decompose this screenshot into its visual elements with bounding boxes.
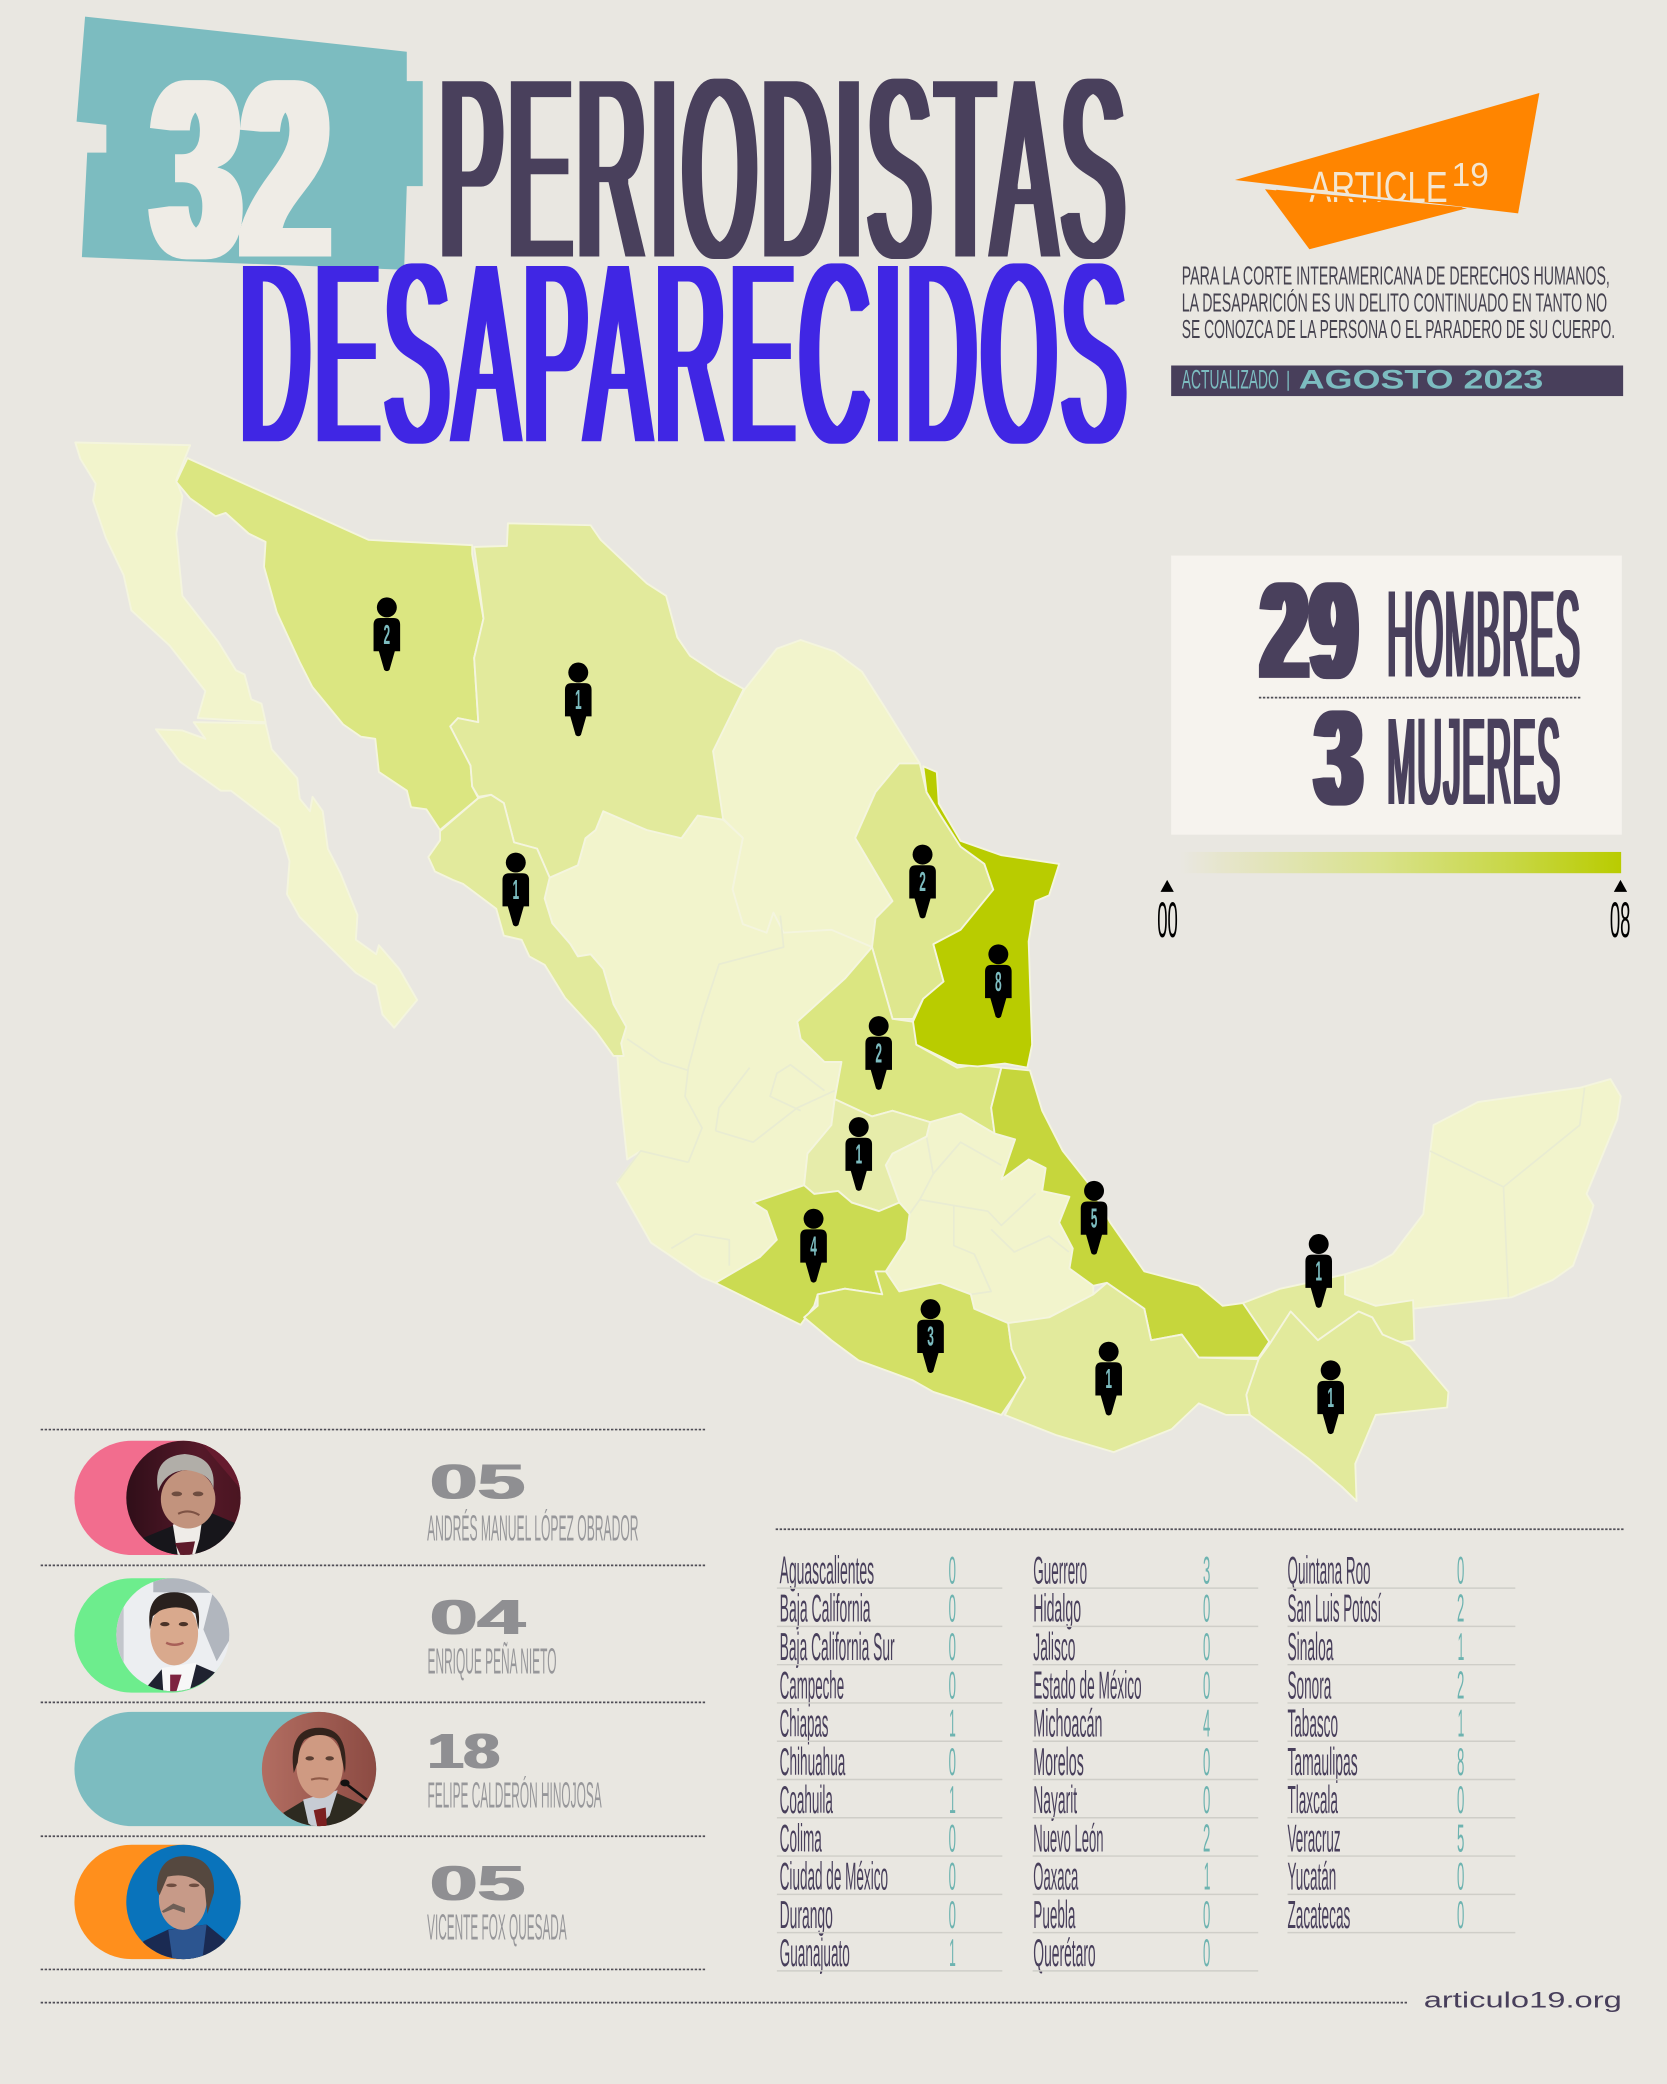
pin: Sonora 2: 2	[384, 619, 390, 650]
map of Mexico	[75, 442, 1621, 1501]
row: Nayarit: Nayarit	[1033, 1779, 1077, 1822]
state: Guanajuato	[804, 1099, 930, 1211]
row: Tabasco: 1	[1458, 1703, 1464, 1746]
state: Coahuila	[712, 640, 920, 947]
text: FELIPE CALDERÓN HINOJOSA	[428, 1776, 602, 1816]
updated date bar: AGOSTO 2023	[1299, 365, 1543, 395]
row: Guerrero	[1033, 1549, 1258, 1592]
row: Guerrero: 3	[1203, 1549, 1210, 1592]
pin: Guanajuato 1	[845, 1117, 872, 1191]
definition text	[1182, 262, 1615, 344]
row: Hidalgo: 0	[1203, 1588, 1210, 1631]
state: Baja California Sur	[156, 722, 417, 1028]
state: Chiapas	[1246, 1312, 1448, 1501]
row: Sinaloa	[1287, 1626, 1515, 1669]
state: Tamaulipas	[913, 766, 1059, 1068]
row: Baja California: Baja California	[780, 1588, 871, 1631]
bar	[74, 1578, 229, 1693]
orange paper plane	[1235, 93, 1539, 213]
row: Sinaloa: 1	[1458, 1626, 1464, 1669]
internal state borders	[617, 915, 1585, 1297]
row: Colima: Colima	[780, 1817, 822, 1860]
row: Colima	[777, 1817, 1002, 1860]
pin: Oaxaca 1: 1	[1105, 1363, 1112, 1394]
row: Chihuahua: Chihuahua	[780, 1741, 846, 1784]
pin: Tamaulipas 8	[985, 944, 1012, 1018]
text: ANDRÉS MANUEL LÓPEZ OBRADOR	[427, 1508, 638, 1548]
row: Nayarit	[1033, 1779, 1258, 1822]
marker 08	[1614, 880, 1627, 892]
count: 05	[430, 1856, 525, 1911]
row: Jalisco: 0	[1203, 1626, 1210, 1669]
row: Guanajuato: 1	[949, 1932, 956, 1975]
row: Durango: Durango	[780, 1894, 833, 1937]
count: 05	[430, 1454, 525, 1509]
row: Estado de México: 0	[1203, 1664, 1210, 1707]
portrait: Enrique Peña Nieto	[113, 1575, 233, 1695]
row: Morelos: Morelos	[1033, 1741, 1084, 1784]
row: Colima: 0	[949, 1817, 956, 1860]
row: Michoacán: Michoacán	[1033, 1703, 1102, 1746]
row: Chiapas	[777, 1703, 1002, 1746]
row: Estado de México: Estado de México	[1033, 1664, 1142, 1707]
row: Chiapas: 1	[949, 1703, 956, 1746]
row: Oaxaca: Oaxaca	[1033, 1856, 1078, 1899]
row: Morelos: 0	[1203, 1741, 1210, 1784]
row: Campeche: 0	[949, 1664, 956, 1707]
row: Sinaloa: Sinaloa	[1287, 1626, 1334, 1669]
row: Sonora	[1287, 1664, 1515, 1707]
row: Morelos	[1033, 1741, 1258, 1784]
row: Jalisco: Jalisco	[1033, 1626, 1075, 1669]
row: Tlaxcala: Tlaxcala	[1287, 1779, 1338, 1822]
row: Zacatecas: Zacatecas	[1287, 1894, 1350, 1937]
row: Veracruz	[1287, 1817, 1515, 1860]
header: number block	[77, 17, 423, 311]
portrait: Felipe Calderón Hinojosa	[259, 1708, 379, 1830]
pin: Tabasco 1	[1305, 1234, 1332, 1308]
pin: Guerrero 3: 3	[927, 1321, 934, 1352]
row: Durango	[777, 1894, 1002, 1937]
pin: Veracruz 5: 5	[1091, 1202, 1097, 1233]
pin: Nuevo León 2: 2	[919, 866, 926, 897]
table column 3	[1287, 1549, 1515, 1937]
text: VICENTE FOX QUESADA	[427, 1908, 567, 1948]
legend: colour scale: 00	[1157, 891, 1178, 948]
updated date bar	[1171, 365, 1623, 396]
state: San Luis Potosí	[797, 947, 1001, 1134]
row: Oaxaca: 1	[1204, 1856, 1210, 1899]
pin: Chihuahua 1	[565, 663, 592, 736]
pin: Tamaulipas 8: 8	[995, 966, 1002, 997]
row: Tlaxcala	[1287, 1779, 1515, 1822]
row: Sonora: 2	[1457, 1664, 1464, 1707]
row: Ciudad de México: Ciudad de México	[780, 1856, 888, 1899]
pin: Chiapas 1: 1	[1327, 1382, 1334, 1413]
state: Baja California	[75, 442, 266, 722]
pin: Guerrero 3	[917, 1299, 944, 1373]
row: Jalisco	[1033, 1626, 1258, 1669]
row: Durango: 0	[949, 1894, 956, 1937]
row: Tlaxcala: 0	[1457, 1779, 1464, 1822]
row: San Luis Potosí: San Luis Potosí	[1287, 1588, 1381, 1631]
state: central states (Querétaro, Hidalgo, México, Tlaxcala, Puebla, Morelos, CDMX)	[886, 1114, 1093, 1323]
row: Nuevo León: Nuevo León	[1033, 1817, 1103, 1860]
row: Baja California Sur: 0	[949, 1626, 956, 1669]
row: Michoacán: 4	[1203, 1703, 1210, 1746]
row: Tamaulipas: 8	[1457, 1741, 1464, 1784]
pin: Sonora 2	[374, 597, 400, 671]
row: Coahuila: 1	[949, 1779, 956, 1822]
row: Puebla	[1033, 1894, 1258, 1937]
teal torn paper shape	[77, 17, 423, 270]
pin: San Luis Potosí 2: 2	[875, 1038, 882, 1069]
bar	[74, 1712, 376, 1826]
row: Hidalgo	[1033, 1588, 1258, 1631]
pin: Sinaloa 1: 1	[512, 874, 519, 905]
row: Puebla: 0	[1203, 1894, 1210, 1937]
pin: Chiapas 1	[1317, 1360, 1344, 1434]
count: 18	[428, 1724, 500, 1779]
pin: Michoacán 4	[800, 1209, 827, 1283]
updated date bar: ACTUALIZADO	[1182, 365, 1279, 395]
row: Guanajuato: Guanajuato	[780, 1932, 850, 1975]
row: Coahuila	[777, 1779, 1002, 1822]
state: Sonora	[176, 458, 483, 830]
row: Chihuahua: 0	[949, 1741, 956, 1784]
president row: Fox	[74, 1841, 567, 1963]
pin: Guanajuato 1: 1	[855, 1139, 862, 1170]
president row: López Obrador	[74, 1435, 638, 1562]
bar	[74, 1845, 241, 1959]
row: Sonora: Sonora	[1287, 1664, 1332, 1707]
row: Aguascalientes: Aguascalientes	[780, 1549, 874, 1592]
state: Guerrero	[804, 1271, 1025, 1415]
row: Baja California Sur	[777, 1626, 1002, 1669]
state: Oaxaca	[1005, 1283, 1259, 1452]
row: Chiapas: Chiapas	[780, 1703, 828, 1746]
portrait: Vicente Fox Quesada	[126, 1844, 241, 1960]
marker 00	[1161, 880, 1174, 892]
state: Yucatán peninsula	[1345, 1079, 1621, 1309]
row: Yucatán: Yucatán	[1287, 1856, 1336, 1899]
row: Quintana Roo: 0	[1457, 1549, 1464, 1592]
row: Quintana Roo: Quintana Roo	[1287, 1549, 1371, 1592]
pin: Tabasco 1: 1	[1315, 1256, 1322, 1287]
dotted separators: presidents	[41, 1430, 1624, 2003]
row: Hidalgo: Hidalgo	[1033, 1588, 1081, 1631]
row: Campeche: Campeche	[780, 1664, 844, 1707]
row: Tamaulipas: Tamaulipas	[1287, 1741, 1358, 1784]
row: Tabasco	[1287, 1703, 1515, 1746]
logo: Article 19: 19	[1452, 157, 1489, 194]
president row: Calderón	[74, 1708, 602, 1830]
state: Nuevo León	[855, 763, 993, 1019]
portrait: Andrés Manuel López Obrador	[126, 1440, 241, 1555]
state: Tabasco	[1243, 1274, 1414, 1343]
table column 2	[1033, 1549, 1258, 1975]
president row: Peña Nieto	[74, 1575, 556, 1695]
states: Durango, Zacatecas, Nayarit, Jalisco, Colima, Aguascalientes	[545, 811, 872, 1283]
state: Sinaloa	[428, 795, 626, 1056]
row: Querétaro: Querétaro	[1033, 1932, 1096, 1975]
row: Ciudad de México: 0	[949, 1856, 956, 1899]
logo: Article 19	[1235, 93, 1539, 249]
row: Aguascalientes: 0	[949, 1549, 956, 1592]
table column 1	[777, 1549, 1002, 1975]
row: Veracruz: Veracruz	[1287, 1817, 1341, 1860]
row: Baja California: 0	[949, 1588, 956, 1631]
panel: gender totals	[1171, 555, 1622, 835]
text: ENRIQUE PEÑA NIETO	[428, 1641, 556, 1681]
row: Querétaro: 0	[1203, 1932, 1210, 1975]
number 29: 29	[1262, 555, 1360, 708]
number 3: 3	[1316, 683, 1361, 833]
row: Tabasco: Tabasco	[1287, 1703, 1338, 1746]
pin: Sinaloa 1	[502, 853, 529, 926]
row: Nayarit: 0	[1203, 1779, 1210, 1822]
text: 08	[1610, 891, 1630, 948]
row: Zacatecas: 0	[1457, 1894, 1464, 1937]
logo wordmark: ARTICLE	[1309, 163, 1448, 212]
row: Nuevo León: 2	[1203, 1817, 1210, 1860]
legend: colour scale	[1157, 852, 1630, 948]
bar	[74, 1441, 241, 1555]
pin: Chihuahua 1: 1	[575, 684, 582, 715]
row: Coahuila: Coahuila	[780, 1779, 833, 1822]
state: Chihuahua	[450, 523, 744, 878]
state: Michoacán	[716, 1185, 910, 1325]
footer: website: articulo19.org	[1424, 1988, 1622, 2013]
row: Puebla: Puebla	[1033, 1894, 1076, 1937]
row: Baja California Sur: Baja California Sur	[780, 1626, 895, 1669]
pin: Michoacán 4: 4	[810, 1230, 817, 1261]
pin: Oaxaca 1	[1095, 1342, 1122, 1415]
row: Oaxaca	[1033, 1856, 1258, 1899]
row: Veracruz: 5	[1457, 1817, 1464, 1860]
row: Guerrero: Guerrero	[1033, 1549, 1087, 1592]
pin: San Luis Potosí 2	[865, 1016, 892, 1090]
row: Yucatán: 0	[1457, 1856, 1464, 1899]
row: San Luis Potosí: 2	[1457, 1588, 1464, 1631]
state: Veracruz	[991, 1068, 1270, 1358]
row: Yucatán	[1287, 1856, 1515, 1899]
pin: Nuevo León 2	[909, 845, 936, 918]
count: 04	[430, 1590, 526, 1645]
pin: Veracruz 5	[1081, 1181, 1107, 1255]
number 32: 32	[154, 28, 332, 311]
